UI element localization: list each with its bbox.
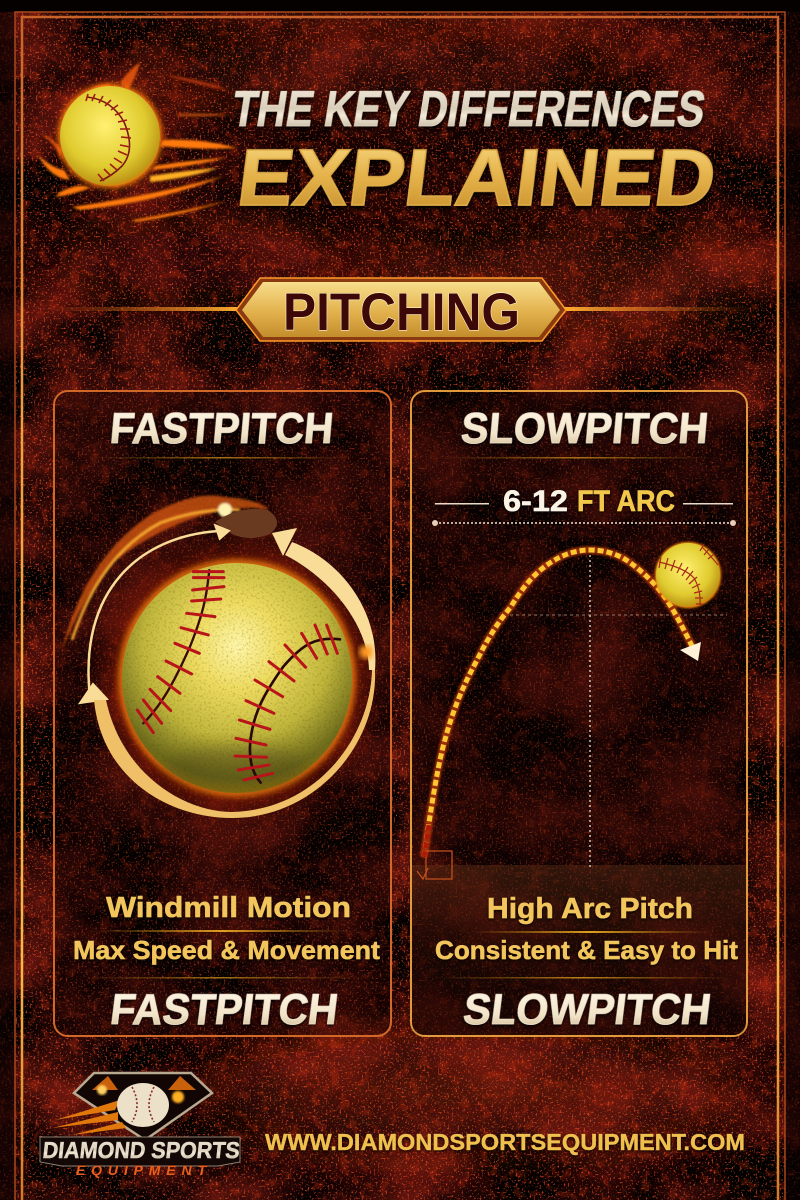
panel: slowpitch bbox=[411, 391, 747, 1036]
title bbox=[228, 80, 721, 223]
large softball bbox=[118, 559, 356, 797]
section banner: pitching bbox=[45, 278, 752, 342]
windmill illustration: ball blur at release point bbox=[215, 509, 277, 538]
panel heading: fastpitch: FASTPITCH bbox=[108, 405, 335, 453]
banner label: PITCHING bbox=[283, 283, 520, 342]
header softball with flames bbox=[38, 62, 237, 222]
footer label: slowpitch: SLOWPITCH bbox=[461, 986, 714, 1034]
home plate marker bbox=[417, 851, 452, 879]
footer label: fastpitch: FASTPITCH bbox=[108, 986, 341, 1034]
logo wordmark plate bbox=[40, 1137, 240, 1166]
caption band bbox=[412, 865, 746, 1035]
logo: diamond sports equipment bbox=[40, 1073, 241, 1178]
arc height unit: FT ARC bbox=[577, 485, 675, 518]
caption: consistent and easy to hit: Consistent & Easy to Hit bbox=[435, 935, 738, 965]
logo wordmark: DIAMOND SPORTS bbox=[41, 1137, 241, 1163]
arc height label bbox=[432, 485, 736, 526]
windmill illustration: flame trail bbox=[62, 495, 268, 650]
windmill illustration: circular motion arrows bbox=[80, 526, 375, 818]
panel: fastpitch bbox=[54, 391, 391, 1036]
title line: explained: EXPLAINED bbox=[233, 133, 721, 223]
small softball bbox=[655, 542, 721, 608]
arc height value: 6-12 bbox=[503, 485, 568, 518]
caption: high arc pitch: High Arc Pitch bbox=[487, 893, 693, 925]
halo behind softball bbox=[87, 528, 387, 828]
arc guide lines bbox=[510, 550, 727, 868]
logo sub-wordmark: EQUIPMENT bbox=[76, 1162, 207, 1178]
pitch trajectory bbox=[424, 550, 693, 857]
caption: max speed and movement: Max Speed & Movement bbox=[73, 935, 380, 965]
panel heading: slowpitch: SLOWPITCH bbox=[459, 405, 710, 453]
trajectory arrowhead bbox=[680, 642, 701, 661]
logo diamond emblem bbox=[52, 1073, 212, 1140]
caption: windmill motion: Windmill Motion bbox=[106, 892, 351, 924]
website url: WWW.DIAMONDSPORTSEQUIPMENT.COM bbox=[265, 1129, 745, 1155]
